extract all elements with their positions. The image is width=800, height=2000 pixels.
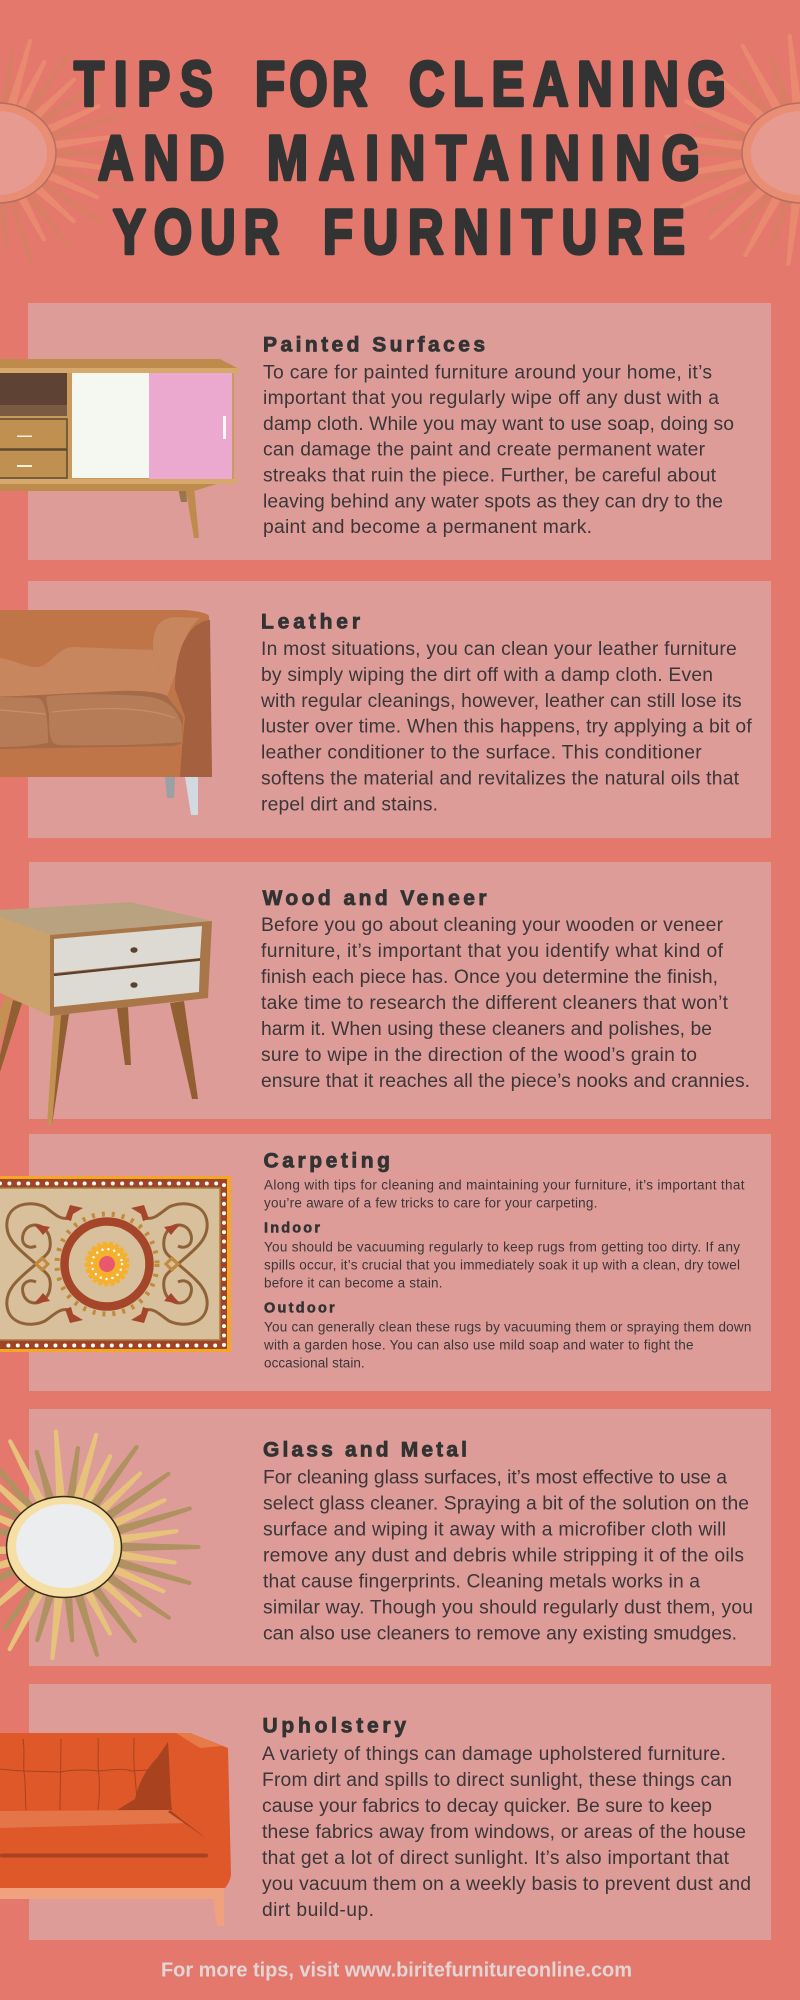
heading: leather: Leather	[261, 610, 360, 633]
text block: wood and veneer	[261, 915, 750, 1092]
text block: glass and metal: For cleaning glass surfaces, it’s most effective to use a	[263, 1467, 727, 1488]
text block: outdoor: with a garden hose. You can also use mild soap and water to fight the	[263, 1337, 694, 1352]
text block: leather: luster over time. When this happens, try applying a bit of	[261, 717, 752, 738]
icon: sunburst mirror	[0, 1429, 201, 1661]
text block: leather: with regular cleanings, however, leather can still lose its	[260, 691, 742, 712]
text block: carpeting intro	[264, 1177, 745, 1210]
text block: wood and veneer: Before you go about cleaning your wooden or veneer	[261, 915, 724, 936]
title: AND	[98, 122, 224, 193]
text block: painted surfaces: damp cloth. While you may want to use soap, doing so	[263, 414, 734, 435]
title	[74, 48, 726, 267]
text block: indoor	[264, 1239, 740, 1290]
heading: glass and metal: Glass and Metal	[263, 1439, 467, 1462]
text block: painted surfaces: streaks that ruin the piece. Further, be careful about	[263, 466, 717, 486]
footer link: For more tips, visit www.biritefurnitureonline.com	[161, 1960, 632, 1982]
text block: leather: by simply wiping the dirt off with a damp cloth. Even	[261, 665, 713, 686]
panel: upholstery	[0, 1684, 771, 1940]
title: CLEANING	[409, 48, 726, 119]
panel: wood and veneer	[0, 862, 771, 1125]
text block: leather: leather conditioner to the surface. This conditioner	[261, 743, 702, 764]
text block: glass and metal: can also use cleaners to remove any existing smudges.	[263, 1623, 737, 1644]
text block: painted surfaces: important that you regularly wipe off any dust with a	[263, 388, 719, 409]
icon: patterned rug	[0, 1176, 231, 1352]
text block: outdoor	[263, 1319, 751, 1370]
icon: leather sofa	[0, 610, 212, 815]
text block: glass and metal: select glass cleaner. Spraying a bit of the solution on the	[263, 1493, 749, 1514]
text block: outdoor: occasional stain.	[264, 1355, 365, 1370]
text block: upholstery: you vacuum them on a weekly basis to prevent dust and	[262, 1874, 751, 1895]
icon: nightstand	[0, 902, 212, 1125]
title: TIPS	[74, 48, 213, 119]
text block: upholstery: A variety of things can damage upholstered furniture.	[262, 1744, 726, 1765]
subheading: outdoor: Outdoor	[264, 1300, 335, 1316]
text block: leather	[260, 639, 752, 815]
icon: right sunburst mirror	[664, 33, 800, 267]
text block: wood and veneer: finish each piece has. Once you determine the finish,	[261, 967, 718, 988]
title: MAINTAINING	[267, 122, 700, 193]
icon: orange sofa	[0, 1733, 231, 1926]
text block: glass and metal: that cause fingerprints. Cleaning metals works in a	[263, 1571, 700, 1592]
icon: left sunburst mirror	[0, 35, 135, 267]
text block: leather: In most situations, you can clean your leather furniture	[261, 639, 737, 660]
text block: leather: repel dirt and stains.	[261, 794, 438, 815]
subheading: indoor: Indoor	[264, 1220, 320, 1236]
text block: upholstery: dirt build-up.	[262, 1900, 374, 1921]
text block: wood and veneer: furniture, it’s important that you identify what kind of	[261, 941, 724, 962]
text block: painted surfaces: paint and become a permanent mark.	[263, 517, 592, 538]
title: YOUR	[113, 196, 279, 267]
text block: wood and veneer: take time to research the different cleaners that won’t	[261, 993, 729, 1014]
panel: leather	[0, 581, 771, 838]
text block: indoor: You should be vacuuming regularly to keep rugs from getting too dirty. If any	[264, 1239, 740, 1254]
panel: carpeting	[0, 1134, 771, 1391]
text block: wood and veneer: ensure that it reaches all the piece’s nooks and crannies.	[261, 1071, 750, 1092]
text block: indoor: before it can become a stain.	[264, 1275, 442, 1290]
text block: painted surfaces: can damage the paint and create permanent water	[263, 440, 706, 461]
text block: painted surfaces: To care for painted furniture around your home, it’s	[263, 362, 712, 383]
panel: glass and metal	[0, 1409, 771, 1666]
text block: glass and metal: remove any dust and debris while stripping it of the oils	[263, 1545, 744, 1566]
title: FOR	[255, 48, 367, 119]
text block: upholstery: that get a lot of direct sunlight. It’s also important that	[262, 1848, 730, 1869]
text block: indoor: spills occur, it’s crucial that you immediately soak it up with a clean, dry towel	[264, 1257, 740, 1272]
text block: leather: softens the material and revitalizes the natural oils that	[261, 768, 740, 790]
text block: glass and metal: surface and wiping it away with a microfiber cloth will	[263, 1519, 726, 1540]
text block: wood and veneer: harm it. When using these cleaners and polishes, be	[261, 1019, 712, 1040]
text block: carpeting intro: you’re aware of a few tricks to care for your carpeting.	[264, 1195, 597, 1210]
text block: glass and metal: similar way. Though you should regularly dust them, you	[263, 1597, 753, 1618]
text block: carpeting intro: Along with tips for cleaning and maintaining your furniture, it’s important that	[264, 1177, 745, 1192]
text block: outdoor: You can generally clean these rugs by vacuuming them or spraying them down	[264, 1319, 751, 1334]
text block: upholstery	[262, 1744, 751, 1921]
title: FURNITURE	[323, 196, 685, 267]
text block: wood and veneer: sure to wipe in the direction of the wood’s grain to	[261, 1045, 697, 1066]
heading: upholstery: Upholstery	[262, 1714, 406, 1737]
heading: painted surfaces: Painted Surfaces	[263, 334, 485, 356]
text block: upholstery: cause your fabrics to decay quicker. Be sure to keep	[262, 1796, 712, 1817]
text block: painted surfaces: leaving behind any water spots as they can dry to the	[263, 491, 723, 512]
text block: glass and metal	[263, 1467, 753, 1644]
heading: carpeting: Carpeting	[264, 1150, 390, 1173]
text block: upholstery: these fabrics away from windows, or areas of the house	[262, 1822, 746, 1843]
panel: painted surfaces	[0, 303, 771, 560]
text block: painted surfaces	[263, 362, 734, 538]
heading: wood and veneer: Wood and Veneer	[262, 887, 486, 910]
icon: sideboard	[0, 359, 239, 538]
text block: upholstery: From dirt and spills to direct sunlight, these things can	[262, 1770, 732, 1791]
